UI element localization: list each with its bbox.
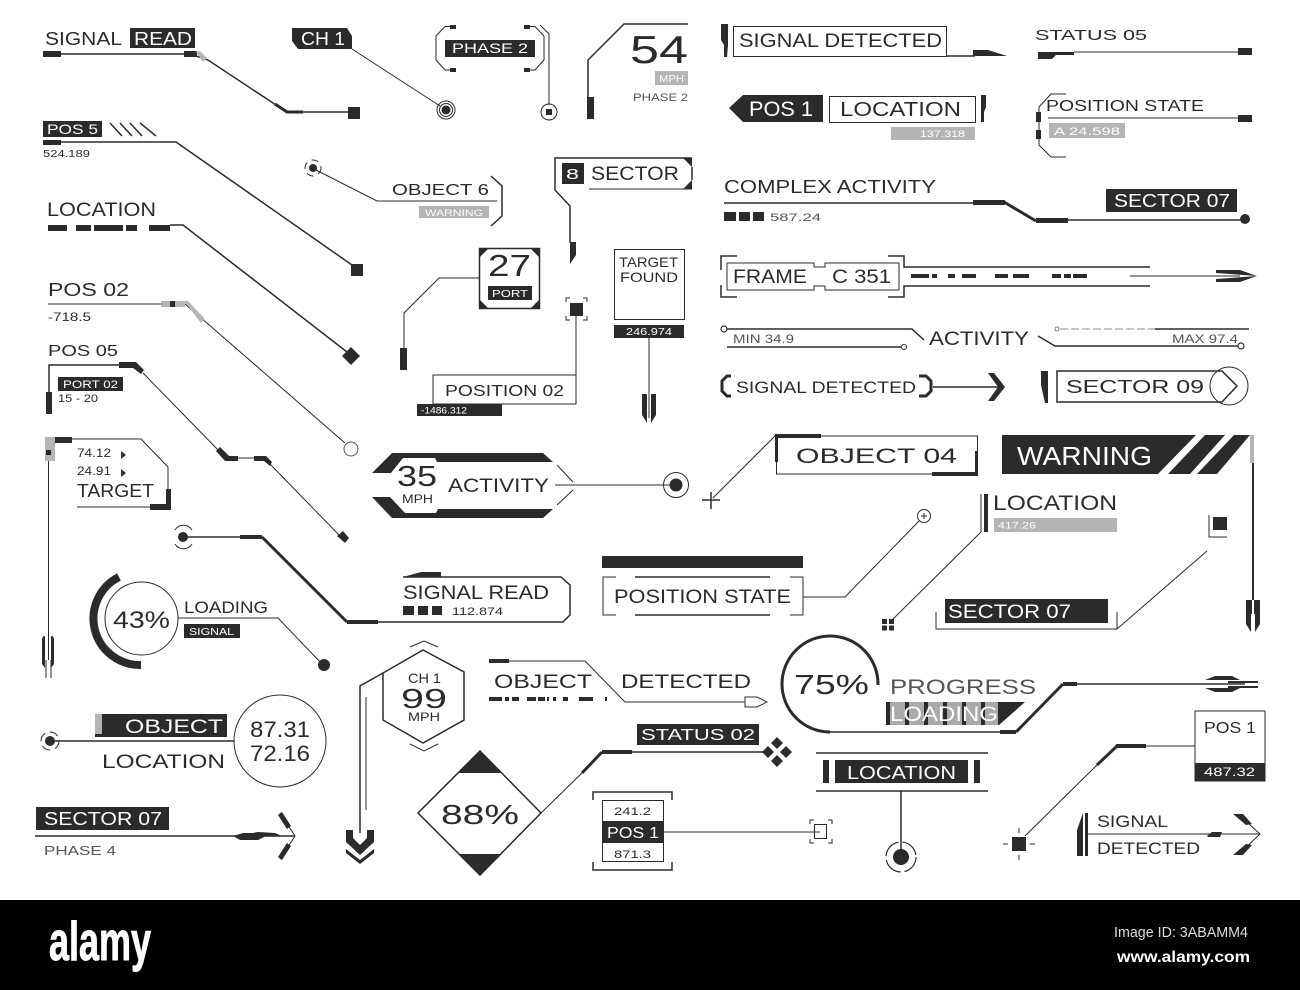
tag: pos 1 location — [729, 95, 986, 140]
callout: object location circle: LOCATION — [102, 752, 225, 773]
callout: activity min max: MIN 34.9 — [733, 332, 794, 346]
callout: pos 5: POS 5 — [47, 121, 98, 137]
footer band: alamy — [49, 910, 151, 972]
callout: object 6 warning: WARNING — [425, 208, 483, 218]
tag: pos 1 location: 137.318 — [920, 129, 965, 139]
callout: complex activity — [724, 177, 1250, 224]
gauge: 88 percent diamond — [418, 724, 792, 875]
callout: pos 02 — [48, 280, 358, 456]
readout: pos 1 241.2 871.3: POS 1 — [607, 825, 659, 842]
callout: location target — [816, 753, 988, 872]
callout: location — [47, 200, 360, 365]
connector: signal read panel — [175, 525, 570, 624]
callout: complex activity: 587.24 — [770, 212, 821, 224]
callout: target readout with long vertical pointer: 74.12 — [77, 446, 111, 460]
callout: signal detected arrow lower: DETECTED — [1097, 839, 1200, 858]
callout: pos 02: -718.5 — [48, 310, 91, 324]
callout: object location circle — [41, 695, 326, 787]
callout: position state right: POSITION STATE — [1046, 98, 1204, 115]
gauge: 88 percent diamond: STATUS 02 — [641, 727, 755, 744]
callout: signal detected arrow — [722, 373, 1005, 401]
readout: 54 mph: 54 — [630, 29, 688, 72]
hexagon: ch 1 99 mph — [346, 641, 464, 864]
panel: target found: FOUND — [620, 269, 678, 285]
badge: 35 mph activity: 35 — [397, 461, 437, 493]
readout: 54 mph: PHASE 2 — [633, 92, 688, 104]
callout: location target: LOCATION — [847, 763, 956, 783]
tag: ch 1 — [292, 28, 455, 119]
callout: object detected: DETECTED — [621, 672, 751, 693]
callout: object 6 warning — [305, 160, 502, 226]
readout: 54 mph — [587, 24, 688, 119]
connector: signal read panel: 112.874 — [452, 606, 503, 618]
callout: location: LOCATION — [47, 200, 156, 221]
heading: status 05: STATUS 05 — [1035, 27, 1147, 44]
callout: target readout with long vertical pointer: TARGET — [77, 481, 154, 501]
badge: 27 port: 27 — [488, 248, 531, 283]
callout: frame c 351 — [721, 256, 1257, 297]
badge: 35 mph activity: ACTIVITY — [448, 476, 549, 497]
callout: object location circle: 72.16 — [250, 741, 310, 766]
callout: object location circle: OBJECT — [125, 717, 224, 738]
connector: signal read panel: SIGNAL READ — [403, 583, 549, 604]
callout: location 417.26: LOCATION — [993, 492, 1117, 515]
callout: frame c 351: FRAME — [733, 267, 807, 288]
callout: frame c 351: C 351 — [832, 267, 891, 288]
tag: sector 09: SECTOR 09 — [1066, 377, 1204, 397]
panel: position state: POSITION STATE — [614, 587, 791, 608]
callout: signal detected arrow lower: SIGNAL — [1097, 812, 1168, 831]
callout: signal read — [43, 28, 360, 119]
callout: object detected: OBJECT — [494, 672, 593, 693]
footer band — [0, 900, 1300, 990]
callout: position 02: POSITION 02 — [445, 383, 564, 400]
readout: pos 1 241.2 871.3: 241.2 — [614, 806, 651, 818]
badge: 35 mph activity — [372, 453, 688, 518]
hexagon: ch 1 99 mph: MPH — [408, 710, 440, 724]
callout: pos 5: 524.189 — [43, 149, 91, 160]
callout: sector 07 lower: SECTOR 07 — [948, 602, 1071, 623]
gauge: 75 percent progress — [782, 636, 1258, 734]
panel: pos 1 487.32 — [1003, 711, 1265, 860]
badge: 27 port — [400, 248, 540, 370]
gauge: 75 percent progress: 75% — [794, 669, 869, 700]
callout: pos 5 — [43, 121, 363, 276]
tag: pos 1 location: LOCATION — [840, 99, 961, 121]
banner: warning: WARNING — [1017, 441, 1152, 471]
callout: object location circle: 87.31 — [250, 717, 310, 742]
heading: signal detected box: SIGNAL DETECTED — [739, 31, 942, 52]
callout: target readout with long vertical pointer — [42, 437, 171, 678]
tag: sector 09 — [1041, 367, 1248, 405]
callout: sector 8 — [555, 158, 692, 264]
panel: target found — [614, 250, 684, 423]
tag: ch 1: CH 1 — [301, 29, 345, 49]
badge: 35 mph activity: MPH — [402, 492, 433, 506]
callout: sector 07 phase 4 arrow — [35, 807, 295, 860]
badge: phase 2: PHASE 2 — [452, 40, 528, 56]
callout: activity min max — [721, 326, 1249, 350]
callout: target readout with long vertical pointer: 24.91 — [77, 464, 111, 478]
callout: signal read: READ — [134, 29, 192, 49]
banner: warning — [1002, 435, 1260, 632]
callout: signal detected arrow lower — [1077, 812, 1260, 858]
callout: position state right — [1036, 94, 1252, 157]
footer band: Image ID: 3ABAMM4 — [1114, 924, 1248, 941]
callout: sector 07 lower — [936, 515, 1227, 629]
panel: target found: TARGET — [619, 254, 678, 270]
callout: pos 05: 15 - 20 — [58, 393, 98, 405]
callout: location 417.26 — [882, 492, 1117, 630]
gauge: 43 percent loading: 43% — [113, 607, 170, 634]
panel: target found: 246.974 — [626, 327, 673, 338]
badge: 27 port: PORT — [492, 289, 528, 300]
callout: signal detected arrow: SIGNAL DETECTED — [736, 378, 916, 397]
callout: activity min max: MAX 97.4 — [1172, 332, 1238, 346]
heading: status 05 — [1035, 27, 1252, 59]
callout: signal read: SIGNAL — [45, 29, 122, 49]
gauge: 88 percent diamond: 88% — [441, 799, 519, 830]
badge: phase 2 — [436, 25, 557, 120]
callout: pos 05: POS 05 — [48, 343, 118, 360]
gauge: 43 percent loading — [93, 577, 330, 671]
heading: signal detected box — [721, 24, 1007, 57]
callout: pos 02: POS 02 — [48, 280, 129, 300]
callout: pos 05: PORT 02 — [63, 379, 118, 391]
callout: complex activity: COMPLEX ACTIVITY — [724, 177, 936, 197]
callout: complex activity: SECTOR 07 — [1114, 191, 1230, 211]
callout: position 02 — [417, 298, 587, 416]
callout: object 04: OBJECT 04 — [796, 445, 957, 468]
panel: position state — [602, 510, 930, 615]
callout: sector 07 phase 4 arrow: PHASE 4 — [44, 843, 116, 858]
gauge: 75 percent progress: LOADING — [890, 703, 998, 726]
panel: pos 1 487.32: 487.32 — [1204, 765, 1255, 779]
gauge: 43 percent loading: LOADING — [184, 598, 268, 617]
callout: activity min max: ACTIVITY — [929, 329, 1029, 350]
hexagon: ch 1 99 mph: 99 — [401, 683, 447, 714]
hexagon: ch 1 99 mph: CH 1 — [408, 670, 441, 686]
callout: sector 8: SECTOR — [591, 164, 679, 185]
callout: position 02: -1486.312 — [421, 406, 467, 416]
readout: 54 mph: MPH — [659, 74, 684, 85]
footer band: www.alamy.com — [1116, 949, 1250, 966]
gauge: 43 percent loading: SIGNAL — [189, 627, 235, 638]
callout: location 417.26: 417.26 — [998, 520, 1036, 530]
gauge: 75 percent progress: PROGRESS — [890, 676, 1036, 699]
callout: object 6 warning: OBJECT 6 — [392, 182, 489, 199]
callout: position state right: A 24.598 — [1054, 126, 1120, 138]
readout: pos 1 241.2 871.3 — [593, 792, 832, 870]
callout: object 04 — [702, 434, 978, 509]
panel: pos 1 487.32: POS 1 — [1204, 720, 1256, 737]
callout: pos 05 — [46, 343, 349, 543]
callout: sector 07 phase 4 arrow: SECTOR 07 — [44, 809, 162, 829]
callout: sector 8: 8 — [566, 166, 579, 183]
tag: pos 1 location: POS 1 — [749, 98, 813, 121]
readout: pos 1 241.2 871.3: 871.3 — [614, 849, 651, 861]
callout: object detected — [489, 659, 767, 707]
